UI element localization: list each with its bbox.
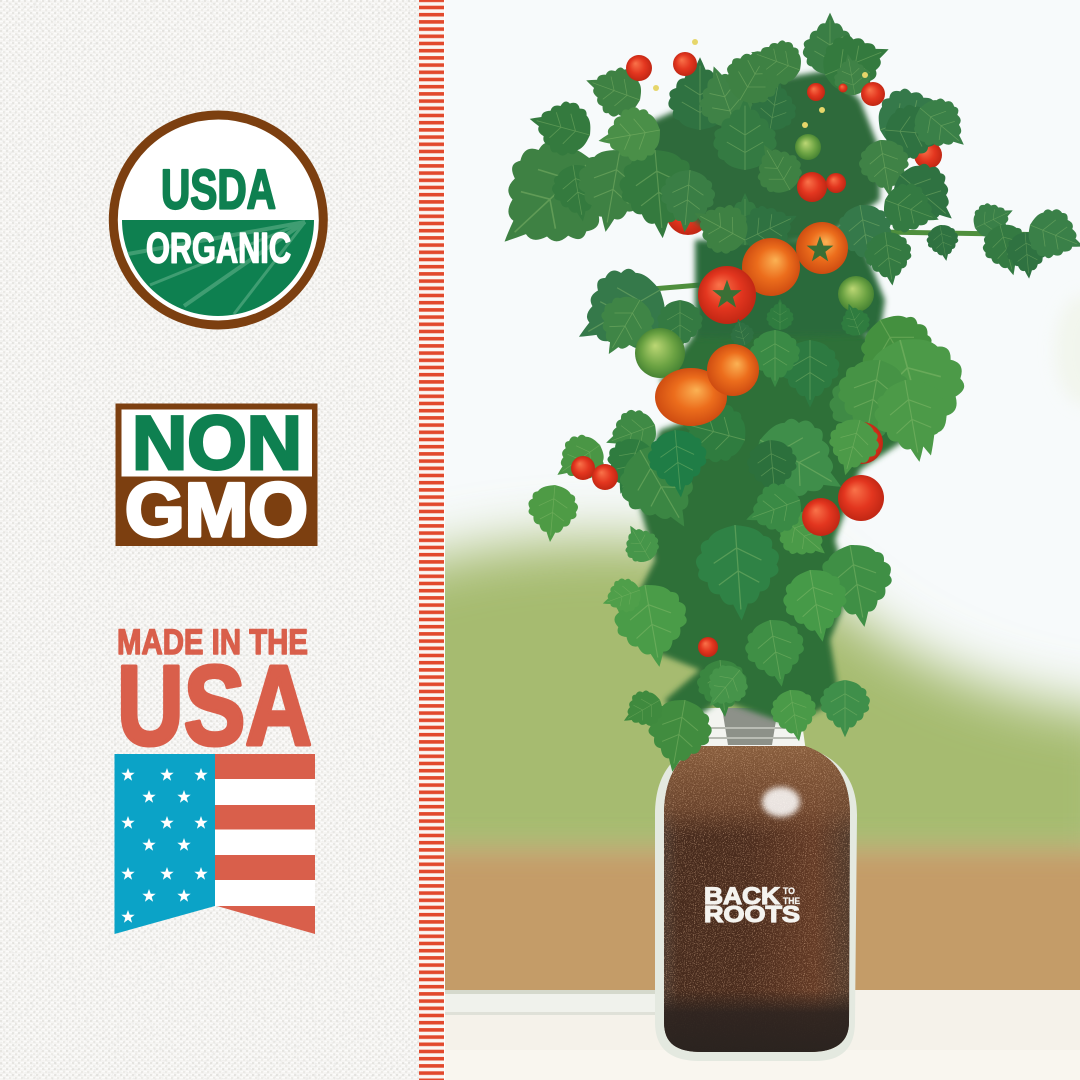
MADE IN THE text: MADE IN THE [117,623,308,662]
flag ribbon [114,754,315,934]
GMO text: GMO [125,468,308,553]
stems [640,130,1060,700]
leaves over the tomatoes [727,299,955,482]
NON text: NON [132,401,302,486]
jar neck [690,708,806,752]
jar logo: Back to the Roots: THE [783,896,800,906]
tomato calyxes [712,236,833,308]
right branch leaves [924,194,1080,281]
jar logo: Back to the Roots [704,883,800,927]
badge: non GMO [116,401,318,553]
tomatoes in front of crown [626,52,885,202]
front tomatoes [571,222,884,657]
tomatoes behind foliage [666,141,942,573]
window sill [445,990,1080,1080]
fabric background panel [0,0,419,1080]
tomato plant [469,13,1080,777]
badge: USDA organic [113,115,323,325]
jar logo: Back to the Roots: ROOTS [704,901,800,927]
USDA text: USDA [161,158,276,220]
middle and lower leaves [525,255,981,777]
USA text: USA [117,642,312,768]
crown foliage mass [620,70,880,245]
jar logo: Back to the Roots: TO [783,886,795,896]
photo background: blurred window view [445,278,1080,990]
green lower half of seal [122,220,314,316]
glass jar with soil [655,708,857,1061]
soil fill [655,745,855,1055]
foliage behind the tomato cluster [695,238,885,338]
badge: made in the USA [114,623,315,934]
flowers [653,39,868,128]
central foliage mass [635,320,905,730]
jar logo: Back to the Roots: BACK [704,883,781,910]
ORGANIC text: ORGANIC [146,224,291,272]
crown leaves [469,13,980,289]
red striped divider [419,0,444,1080]
